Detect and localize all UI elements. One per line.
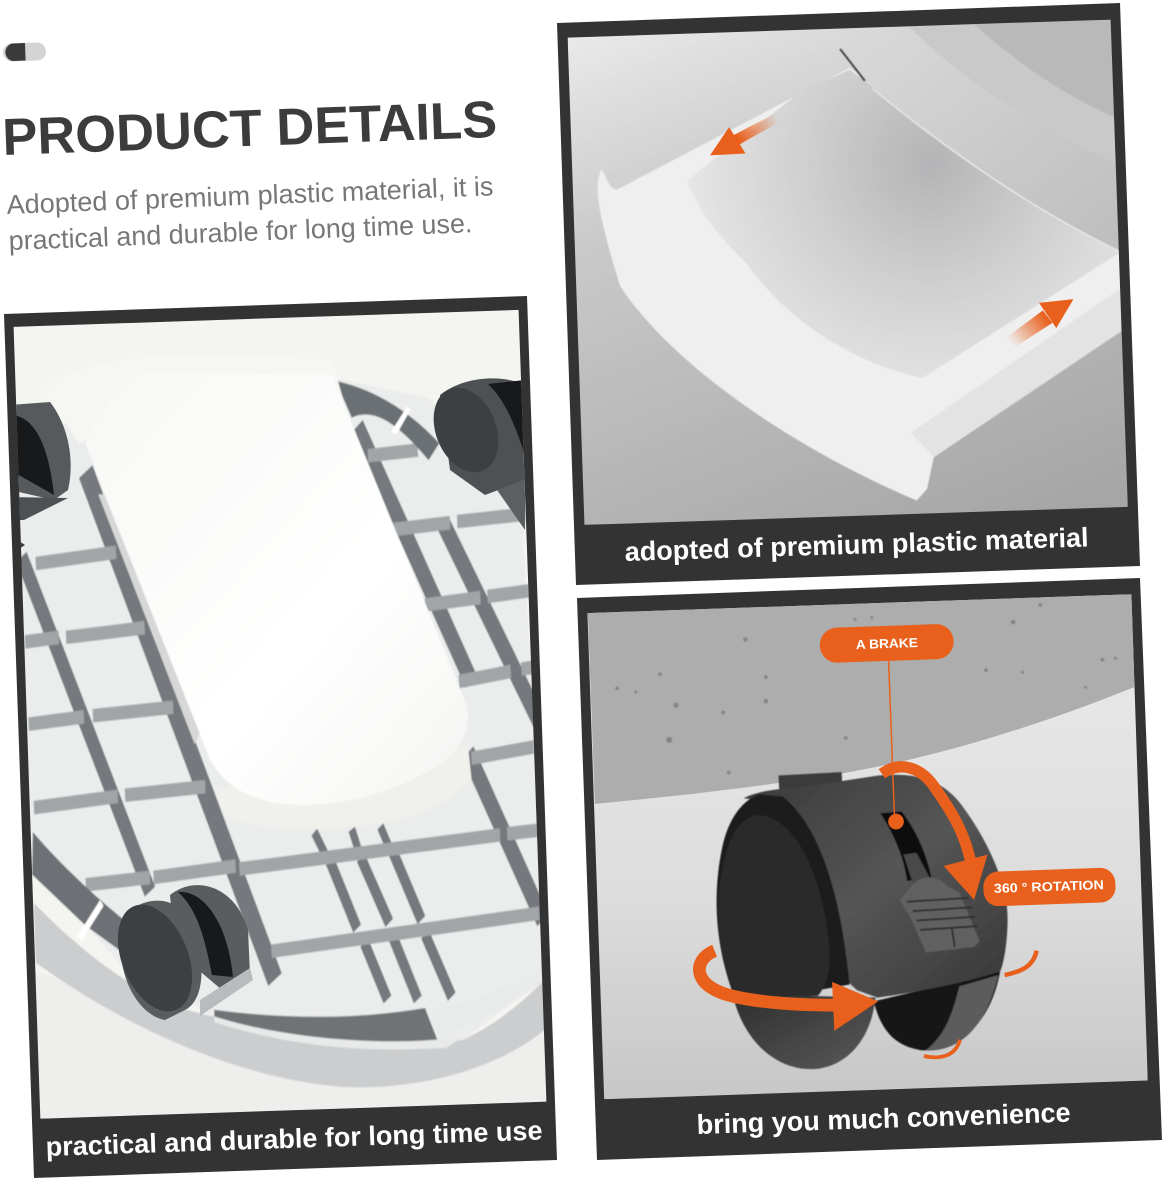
lower wheels bbox=[732, 994, 876, 1069]
photo: plate underside with removable tray bbox=[14, 310, 546, 1119]
casters in pixel coordinates bbox=[10, 378, 525, 1022]
tray white front bbox=[598, 68, 1121, 500]
wheel outer ring bbox=[717, 794, 850, 1001]
text block: description: Adopted of premium plastic material, it is bbox=[6, 171, 494, 220]
dark diagonal ribs bbox=[21, 426, 543, 1000]
label: A BRAKE: A BRAKE bbox=[856, 635, 918, 652]
wheel face bbox=[718, 815, 830, 998]
arrow left bbox=[710, 113, 781, 155]
tray lip bbox=[316, 751, 472, 830]
pill backs bbox=[819, 624, 954, 663]
arrow: vertical rotation bbox=[882, 767, 988, 900]
arrow: horizontal rotation bbox=[699, 951, 1037, 1057]
caption: bring you much convenience bbox=[696, 1097, 1071, 1140]
caster: bottom-left bbox=[118, 885, 253, 1020]
photo: slide-out tray bbox=[568, 20, 1128, 525]
panel: practical and durable bbox=[0, 290, 560, 1180]
icon: toggle pill bbox=[3, 42, 46, 62]
photo: caster wheel bbox=[588, 594, 1148, 1100]
text block: description bbox=[6, 171, 494, 256]
tray flange bbox=[67, 378, 343, 442]
white tray bbox=[86, 372, 468, 805]
caster bbox=[717, 772, 1008, 1069]
text block: description: practical and durable for long time use. bbox=[8, 208, 473, 256]
lever bbox=[900, 877, 980, 953]
panel: adopted of premium plastic bbox=[555, 0, 1155, 590]
label: 360 rotation: 360 ° ROTATION bbox=[994, 877, 1104, 896]
title: PRODUCT DETAILS bbox=[1, 91, 498, 167]
plate base bbox=[18, 375, 546, 1048]
tray side strip bbox=[98, 494, 200, 744]
bowl bbox=[864, 78, 1116, 248]
plate outer rim bbox=[34, 903, 547, 1087]
leader line bbox=[889, 661, 895, 819]
plate dark inner rim bbox=[32, 832, 122, 950]
caster: top-right bbox=[434, 378, 525, 530]
caption: adopted of premium plastic material bbox=[624, 522, 1089, 567]
top arc dark bbox=[336, 381, 439, 460]
hood bbox=[744, 775, 1008, 998]
panel: bring you much convenience bbox=[577, 578, 1163, 1170]
arrow right bbox=[1007, 299, 1073, 348]
light horizontal ribs bbox=[25, 450, 539, 951]
tray floor bbox=[687, 70, 1119, 378]
brake slot bbox=[880, 811, 931, 881]
bowl underside bbox=[587, 591, 1134, 804]
caption: practical and durable for long time use bbox=[45, 1116, 543, 1162]
caster: top-left bbox=[16, 402, 71, 548]
